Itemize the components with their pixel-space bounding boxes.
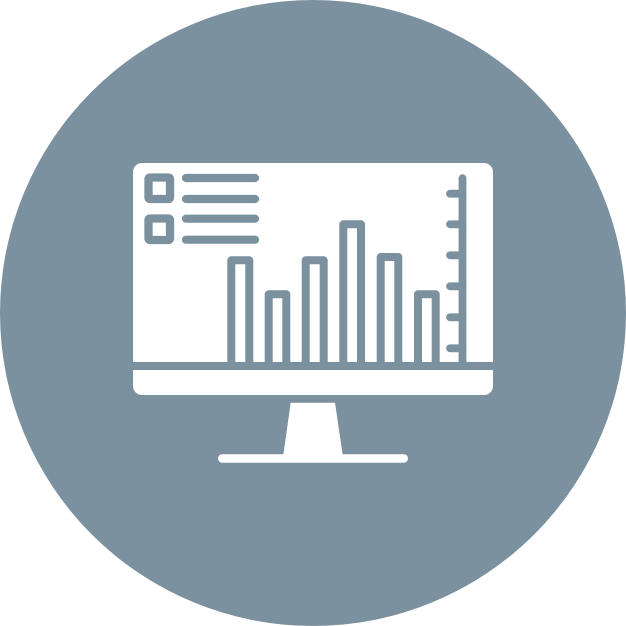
bar 5 [381,257,398,363]
bar chart [231,224,436,363]
checkbox 2 [148,218,170,240]
monitor [133,163,493,463]
list lines [186,178,255,240]
bar 3 [306,260,324,363]
checklist [148,178,255,240]
bar 1 [231,260,249,363]
ruler axis [450,178,462,363]
bar 2 [269,294,286,363]
monitor screen [133,163,493,362]
monitor base [218,454,408,463]
monitor bezel [133,370,493,395]
ruler vertical line [459,178,466,363]
bar 6 [418,294,436,363]
monitor divider [133,354,493,362]
ruler ticks [450,194,462,348]
checkbox 1 [148,178,170,199]
bar 4 [343,224,361,363]
monitor stand [283,403,343,455]
